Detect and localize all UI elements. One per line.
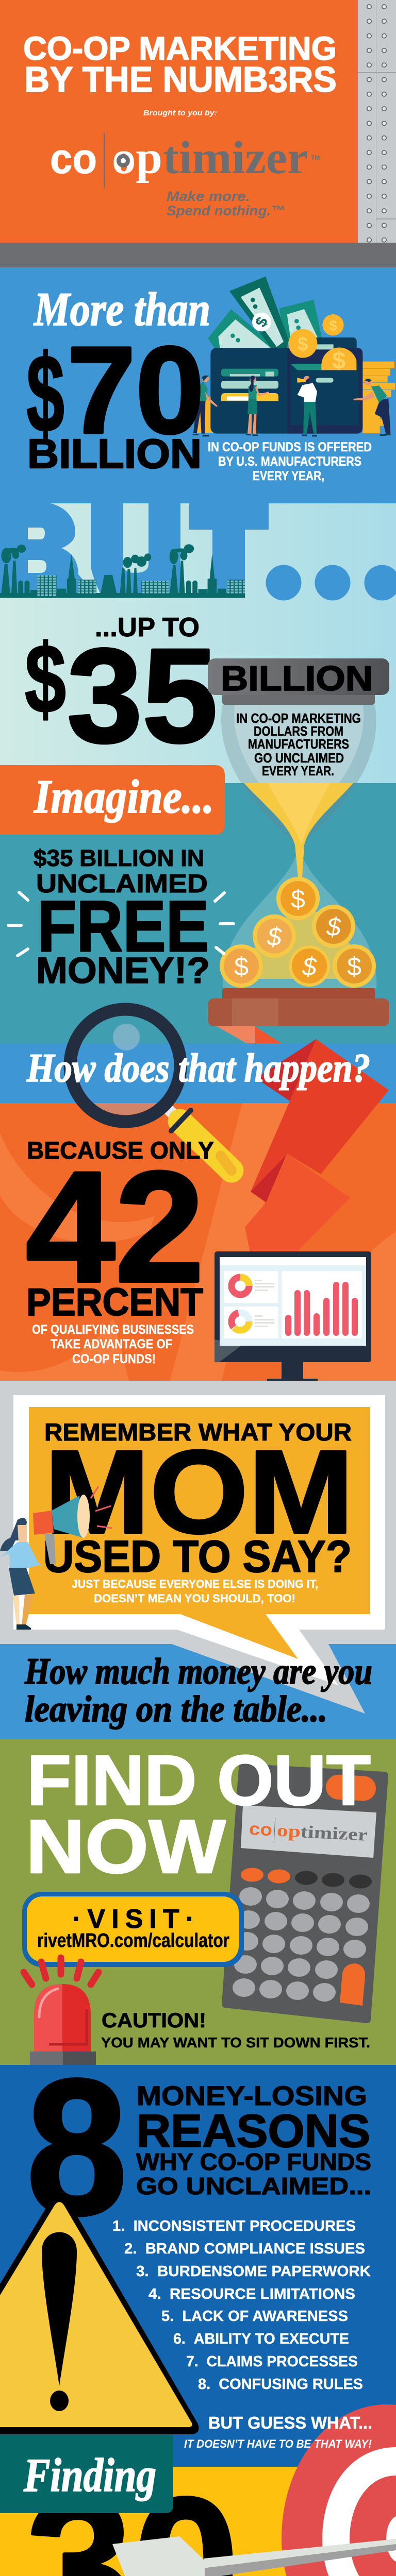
coin stacks (196, 362, 395, 433)
icon: target (282, 2404, 396, 2576)
donut charts (228, 1277, 253, 1334)
tagline (167, 189, 285, 218)
heading (26, 1741, 371, 1889)
icon: alarm light (24, 1958, 98, 2065)
icon: warning triangle (0, 2196, 199, 2434)
panel: imagine (0, 658, 396, 1078)
logo: co-optimizer: op (112, 132, 162, 183)
calculator screen logo (249, 1817, 368, 1848)
heading: up to: ...UP TO (95, 613, 200, 642)
hourglass text: BILLION (221, 659, 373, 698)
list of reasons: 4. RESOURCE LIMITATIONS (148, 2286, 355, 2302)
person man with megaphone (297, 376, 317, 436)
logo: co-optimizer: timizer (163, 132, 308, 183)
tagline: Make more. (167, 189, 250, 204)
illustration: calculator (225, 1767, 385, 2020)
hourglass cap (208, 658, 389, 705)
logo: co-optimizer: co (50, 134, 97, 182)
text block: EVERY YEAR, (253, 469, 324, 483)
person left (192, 375, 218, 436)
heading (136, 2081, 371, 2199)
illustration: woman with megaphone (0, 1486, 112, 1630)
text block: CO-OP FUNDS! (72, 1352, 156, 1366)
icon: sparks (8, 892, 234, 956)
speech bubble (13, 1395, 385, 1685)
text block: IN CO-OP FUNDS IS OFFERED (208, 440, 372, 454)
script: how much money: leaving on the table... (25, 1688, 327, 1730)
list of reasons: 2. BRAND COMPLIANCE ISSUES (124, 2241, 365, 2257)
hourglass text: IN CO-OP MARKETING (236, 710, 361, 726)
text block: DOESN’T MEAN YOU SHOULD, TOO! (94, 1592, 295, 1605)
text block: OF QUALIFYING BUSINESSES (32, 1323, 194, 1337)
heading: free money (34, 845, 210, 991)
callout: imagine (0, 765, 225, 835)
riveted metal strip (358, 0, 396, 243)
panel: how does that happen (0, 1009, 396, 1381)
hourglass text (221, 659, 373, 778)
list of reasons: 6. ABILITY TO EXECUTE (173, 2331, 349, 2347)
caution text: CAUTION! (102, 2009, 206, 2032)
heading: free money: UNCLAIMED (36, 869, 208, 898)
hourglass text: EVERY YEAR. (262, 763, 334, 778)
but guess what text: IT DOESN’T HAVE TO BE THAT WAY! (184, 2437, 372, 2450)
glass (221, 705, 376, 988)
callout: imagine: Imagine... (34, 770, 214, 823)
panel: how much money band (0, 1644, 396, 1739)
hourglass text: DOLLARS FROM (254, 723, 343, 739)
illustration: wallet and money (192, 277, 395, 436)
illustration: wallet and money: $ (329, 318, 337, 334)
background swirls (0, 1103, 396, 1381)
panel: remember what your mom used to say (0, 1381, 396, 1730)
heading: REMEMBER WHAT YOUR (44, 1418, 352, 1446)
but guess what text (184, 2413, 372, 2450)
heading: free money: FREE (37, 886, 209, 967)
big word: but (0, 503, 396, 601)
coins: $ (267, 922, 282, 951)
list of reasons: 1. INCONSISTENT PROCEDURES (112, 2218, 356, 2234)
stat: 42 percent: 42 (26, 1139, 204, 1315)
hourglass text: GO UNCLAIMED (254, 750, 344, 766)
text block: TAKE ADVANTAGE OF (51, 1337, 172, 1351)
calculator buttons (233, 1868, 372, 2006)
bank notes (208, 277, 322, 349)
list of reasons: 5. LACK OF AWARENESS (161, 2308, 348, 2325)
logo: co-optimizer: TM (311, 154, 320, 161)
heading: FIND OUT (27, 1741, 371, 1820)
illustration: factory skyline (0, 544, 245, 598)
coins: $ (291, 885, 305, 913)
text block (32, 1323, 194, 1366)
big number: 70 (67, 321, 204, 459)
illustration: hourglass (208, 658, 389, 1078)
calculator screen logo: op (276, 1821, 301, 1841)
big number (26, 321, 204, 477)
coins (288, 314, 356, 370)
big number: $ (26, 331, 64, 455)
callout: finding: Finding (23, 2449, 156, 2501)
tagline: Spend nothing.™ (167, 203, 285, 218)
coins (220, 877, 376, 988)
coins: $ (302, 952, 317, 981)
script: how much money (24, 1651, 372, 1730)
byline: Brought to you by: (143, 109, 217, 117)
panel: finding 30 thousand (0, 2434, 396, 2576)
coins: $ (234, 952, 249, 981)
script: more than: More than (33, 283, 210, 335)
person right (353, 379, 390, 436)
callout: finding (0, 2434, 173, 2513)
heading: GO UNCLAIMED... (136, 2173, 371, 2199)
bank notes: $ (252, 314, 271, 330)
arrow (245, 1039, 389, 1270)
caution text: YOU MAY WANT TO SIT DOWN FIRST. (101, 2035, 370, 2050)
panel: but (0, 503, 396, 784)
wallet (210, 337, 362, 434)
caution text (101, 2009, 370, 2050)
heading: REASONS (137, 2106, 370, 2157)
heading: free money: MONEY!? (36, 951, 210, 991)
big number: 35: 35 (67, 621, 218, 771)
callout: visit calculator: ·VISIT· (72, 1904, 194, 1934)
divider band (0, 243, 396, 267)
heading: CO-OP MARKETING (23, 30, 337, 67)
coins: $ (326, 912, 341, 941)
text block (208, 440, 372, 483)
heading: NOW (26, 1804, 226, 1889)
stat: 42 percent: PERCENT (26, 1280, 203, 1324)
list of reasons (112, 2218, 371, 2393)
hourglass base (208, 988, 389, 1026)
text block (72, 1578, 318, 1605)
panel: title (0, 0, 396, 243)
heading: MONEY-LOSING (137, 2081, 367, 2111)
heading: WHY CO-OP FUNDS (136, 2148, 371, 2175)
list of reasons: 3. BURDENSOME PAPERWORK (136, 2263, 371, 2280)
but guess what text: BUT GUESS WHAT... (208, 2413, 372, 2432)
person woman (246, 376, 269, 436)
hourglass text: MANUFACTURERS (248, 736, 349, 752)
coins: $ (347, 952, 361, 981)
big number: 35: $ (25, 624, 66, 734)
monitor with dashboard (214, 1251, 371, 1381)
stat: 42 percent: BECAUSE ONLY (27, 1137, 214, 1164)
icon: arrow in target (112, 2536, 396, 2576)
panel: finding yellow (0, 2467, 396, 2576)
text block: JUST BECAUSE EVERYONE ELSE IS DOING IT, (72, 1578, 318, 1590)
big number: BILLION (27, 431, 202, 477)
panel: 8 reasons (0, 2040, 396, 2576)
heading: BY THE NUMB3RS (24, 59, 337, 99)
text block: BY U.S. MANUFACTURERS (218, 454, 361, 469)
arrow top behind base (217, 1026, 293, 1078)
logo: co-optimizer (50, 132, 320, 188)
callout: visit calculator (22, 1892, 244, 1967)
sand (229, 783, 371, 979)
heading (23, 30, 337, 99)
heading: MOM (44, 1426, 354, 1558)
panel: find out now (0, 1739, 396, 2065)
illustration: wallet and money: $ (298, 333, 308, 354)
illustration: wallet and money: $ (332, 347, 345, 374)
list of reasons: 8. CONFUSING RULES (198, 2376, 363, 2393)
calculator screen logo: timizer (300, 1822, 368, 1845)
icon: magnifying glass (70, 1009, 232, 1171)
calculator screen logo: co (249, 1819, 273, 1840)
bar chart (285, 1282, 358, 1336)
heading: USED TO SAY? (43, 1532, 352, 1582)
big number 8: 8 (26, 2040, 127, 2255)
callout: visit calculator: rivetMRO.com/calculator (37, 1930, 229, 1952)
panel: 70 billion (0, 267, 396, 504)
heading: free money: $35 BILLION IN (34, 845, 204, 871)
list of reasons: 7. CLAIMS PROCESSES (186, 2353, 358, 2370)
